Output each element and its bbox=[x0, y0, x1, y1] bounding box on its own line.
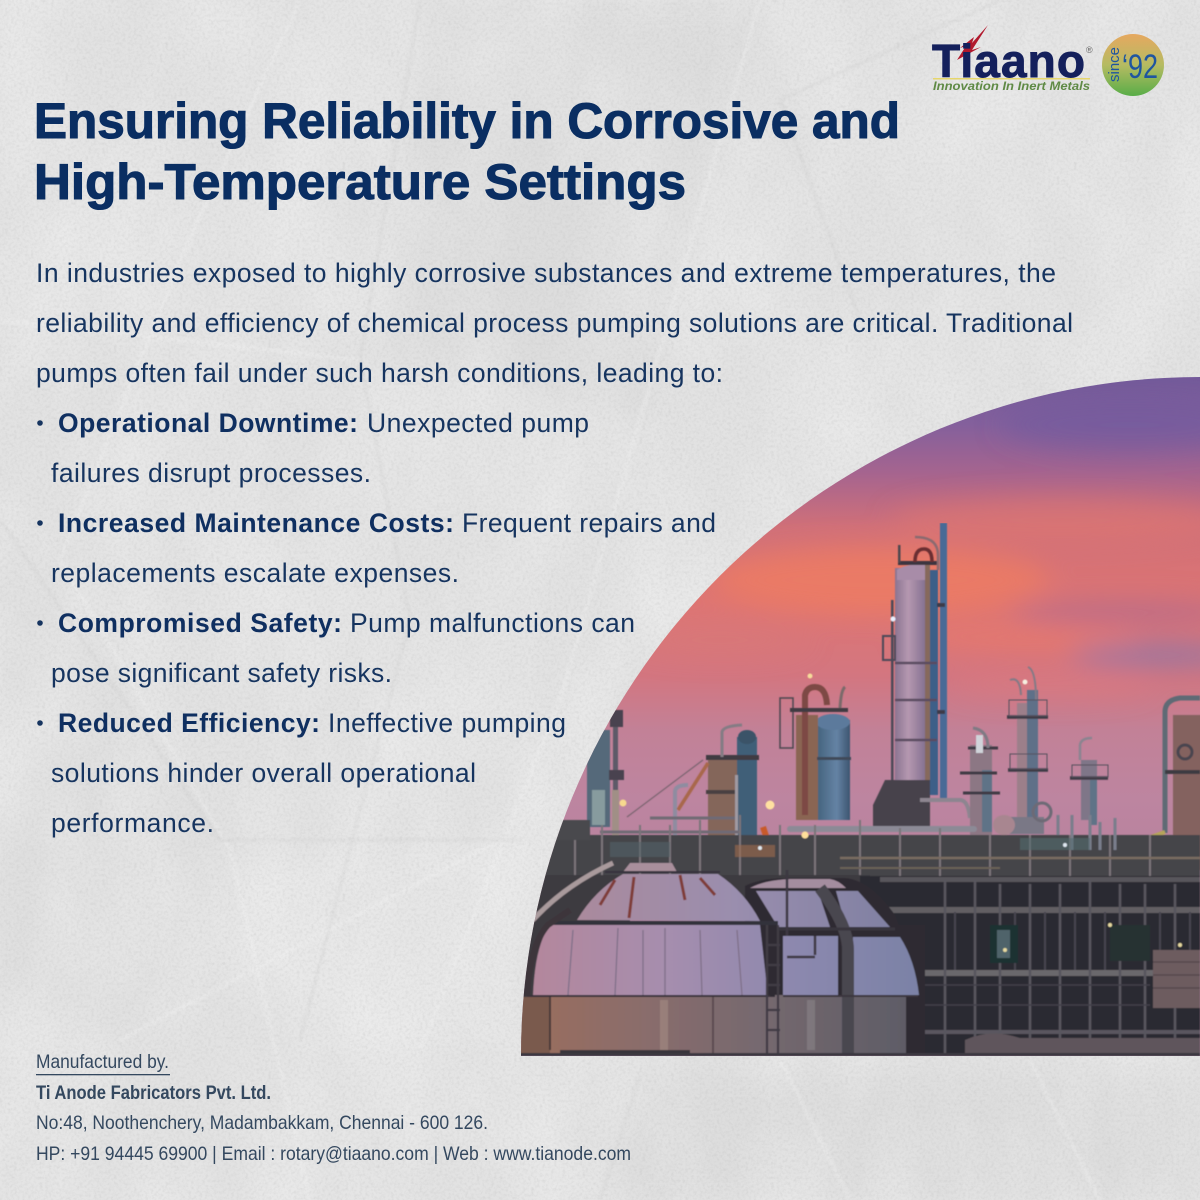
footer: manufacturer details: HP: +91 94445 69900 | Email : rotary@tiaano.com | Web : www.tianode.com bbox=[36, 1143, 631, 1165]
photo: refinery at sunset in quarter circle bbox=[520, 377, 1200, 1057]
intro paragraph: In industries exposed to highly corrosive substances and extreme temperatures, the bbox=[36, 258, 1056, 288]
since '92 badge bbox=[1102, 34, 1164, 96]
bullet: reduced efficiency: Ineffective pumping bbox=[328, 708, 566, 738]
title: Ensuring Reliability in Corrosive and bbox=[34, 93, 900, 149]
bullet: operational downtime: Unexpected pump bbox=[367, 408, 589, 438]
sphere: front left bbox=[520, 863, 1200, 1056]
bullet: increased maintenance costs: replacements escalate expenses. bbox=[51, 558, 459, 588]
sky bbox=[520, 377, 1200, 1057]
bullet: reduced efficiency: solutions hinder overall operational bbox=[51, 758, 476, 788]
title: High-Temperature Settings bbox=[34, 154, 686, 210]
bullet: increased maintenance costs bbox=[37, 508, 716, 588]
bullet: operational downtime: failures disrupt processes. bbox=[51, 458, 371, 488]
far left tower bbox=[586, 709, 627, 836]
footer: manufacturer details: Ti Anode Fabricators Pvt. Ltd. bbox=[36, 1082, 271, 1104]
tower with arc pipe bbox=[780, 674, 851, 820]
main column bbox=[873, 523, 970, 830]
since '92 badge: ‘92 bbox=[1122, 48, 1158, 86]
logo wordmark: Tiaano bbox=[932, 35, 1085, 87]
title bbox=[34, 93, 900, 210]
footer: manufacturer details bbox=[36, 1051, 631, 1165]
logo registered mark: ® bbox=[1086, 45, 1093, 55]
bullet list bbox=[37, 408, 716, 838]
bullet: compromised safety: Compromised Safety: bbox=[58, 608, 342, 638]
big right column bbox=[1151, 694, 1200, 870]
bullet: increased maintenance costs: Increased Maintenance Costs: bbox=[58, 508, 454, 538]
intro paragraph bbox=[36, 258, 1073, 388]
footer: manufacturer details: No:48, Noothenchery, Madambakkam, Chennai - 600 126. bbox=[36, 1112, 488, 1134]
intro paragraph: reliability and efficiency of chemical process pumping solutions are critical. Traditional bbox=[36, 308, 1073, 338]
tower left-centre bbox=[626, 723, 770, 836]
logo rule bbox=[933, 78, 1090, 80]
bullet: reduced efficiency bbox=[37, 708, 566, 838]
bullet: compromised safety: Pump malfunctions can bbox=[350, 608, 635, 638]
logo tagline: Innovation In Inert Metals bbox=[933, 81, 1090, 93]
sphere: back right bbox=[745, 870, 925, 1056]
bullet: operational downtime: Operational Downtime: bbox=[58, 408, 358, 438]
bullet: reduced efficiency: performance. bbox=[51, 808, 214, 838]
bullet: compromised safety: pose significant safety risks. bbox=[51, 658, 392, 688]
logo lightning bolt bbox=[957, 25, 988, 60]
mid tower bbox=[960, 728, 1000, 835]
since '92 badge: since bbox=[1106, 47, 1123, 82]
short tower bbox=[1070, 738, 1108, 825]
intro paragraph: pumps often fail under such harsh conditions, leading to: bbox=[36, 358, 723, 388]
bullet: increased maintenance costs: Frequent repairs and bbox=[462, 508, 716, 538]
slim tower bbox=[1007, 667, 1048, 818]
logo: Tiaano since '92 bbox=[932, 25, 1164, 96]
bullet: compromised safety bbox=[37, 608, 635, 688]
footer: manufacturer details: Manufactured by. bbox=[36, 1051, 169, 1073]
bullet: reduced efficiency: Reduced Efficiency: bbox=[58, 708, 320, 738]
bullet: operational downtime bbox=[37, 408, 589, 488]
process structure bbox=[860, 876, 1200, 1056]
pipe rack and horizontal pipes bbox=[520, 800, 1200, 1000]
